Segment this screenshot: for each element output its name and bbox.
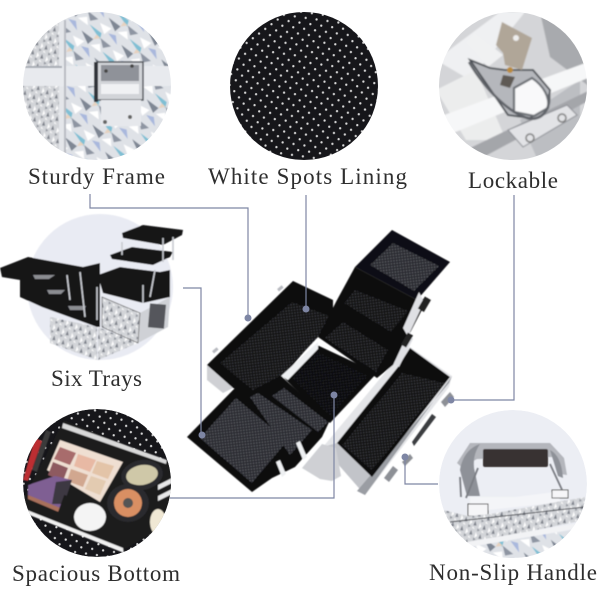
label: spacious bottom: Spacious Bottom [12,561,180,586]
label: white spots lining: White Spots Lining [208,164,408,189]
label: lockable: Lockable [468,168,558,193]
icon: black trays [0,225,183,327]
circle photo: makeup inside the case [20,409,176,557]
circle photo: white spots lining [230,12,378,160]
circle photo: lock close-up [436,10,590,165]
icon: hinge latch [94,62,143,126]
callout line: non-slip handle [402,454,438,484]
folded lower trays [187,377,341,492]
circle photo: six trays case [0,214,183,360]
circle photo: sturdy frame close-up [23,12,171,160]
callout line: six trays [183,288,206,438]
center well [281,342,377,423]
callout line: lockable [448,195,514,404]
icon: lock hasp and key [465,22,577,147]
label: non-slip handle: Non-Slip Handle [429,560,597,585]
lower left tray [200,398,287,483]
callout line: sturdy frame [90,194,252,322]
icon: cosmetics tray [20,420,176,553]
icon: handle [443,443,589,562]
label: sturdy frame: Sturdy Frame [28,164,165,189]
circle photo: non-slip handle [439,410,589,562]
open train case, central product image [187,230,454,495]
callout line: spacious bottom [170,392,338,498]
label: six trays: Six Trays [51,366,142,391]
left lid [207,281,333,394]
icon: side handle and latches [384,392,454,482]
icon: silver case base [50,317,97,360]
stacked trays, upper right [318,230,450,378]
right case half [323,347,454,495]
callout line: white spots lining [302,195,310,312]
